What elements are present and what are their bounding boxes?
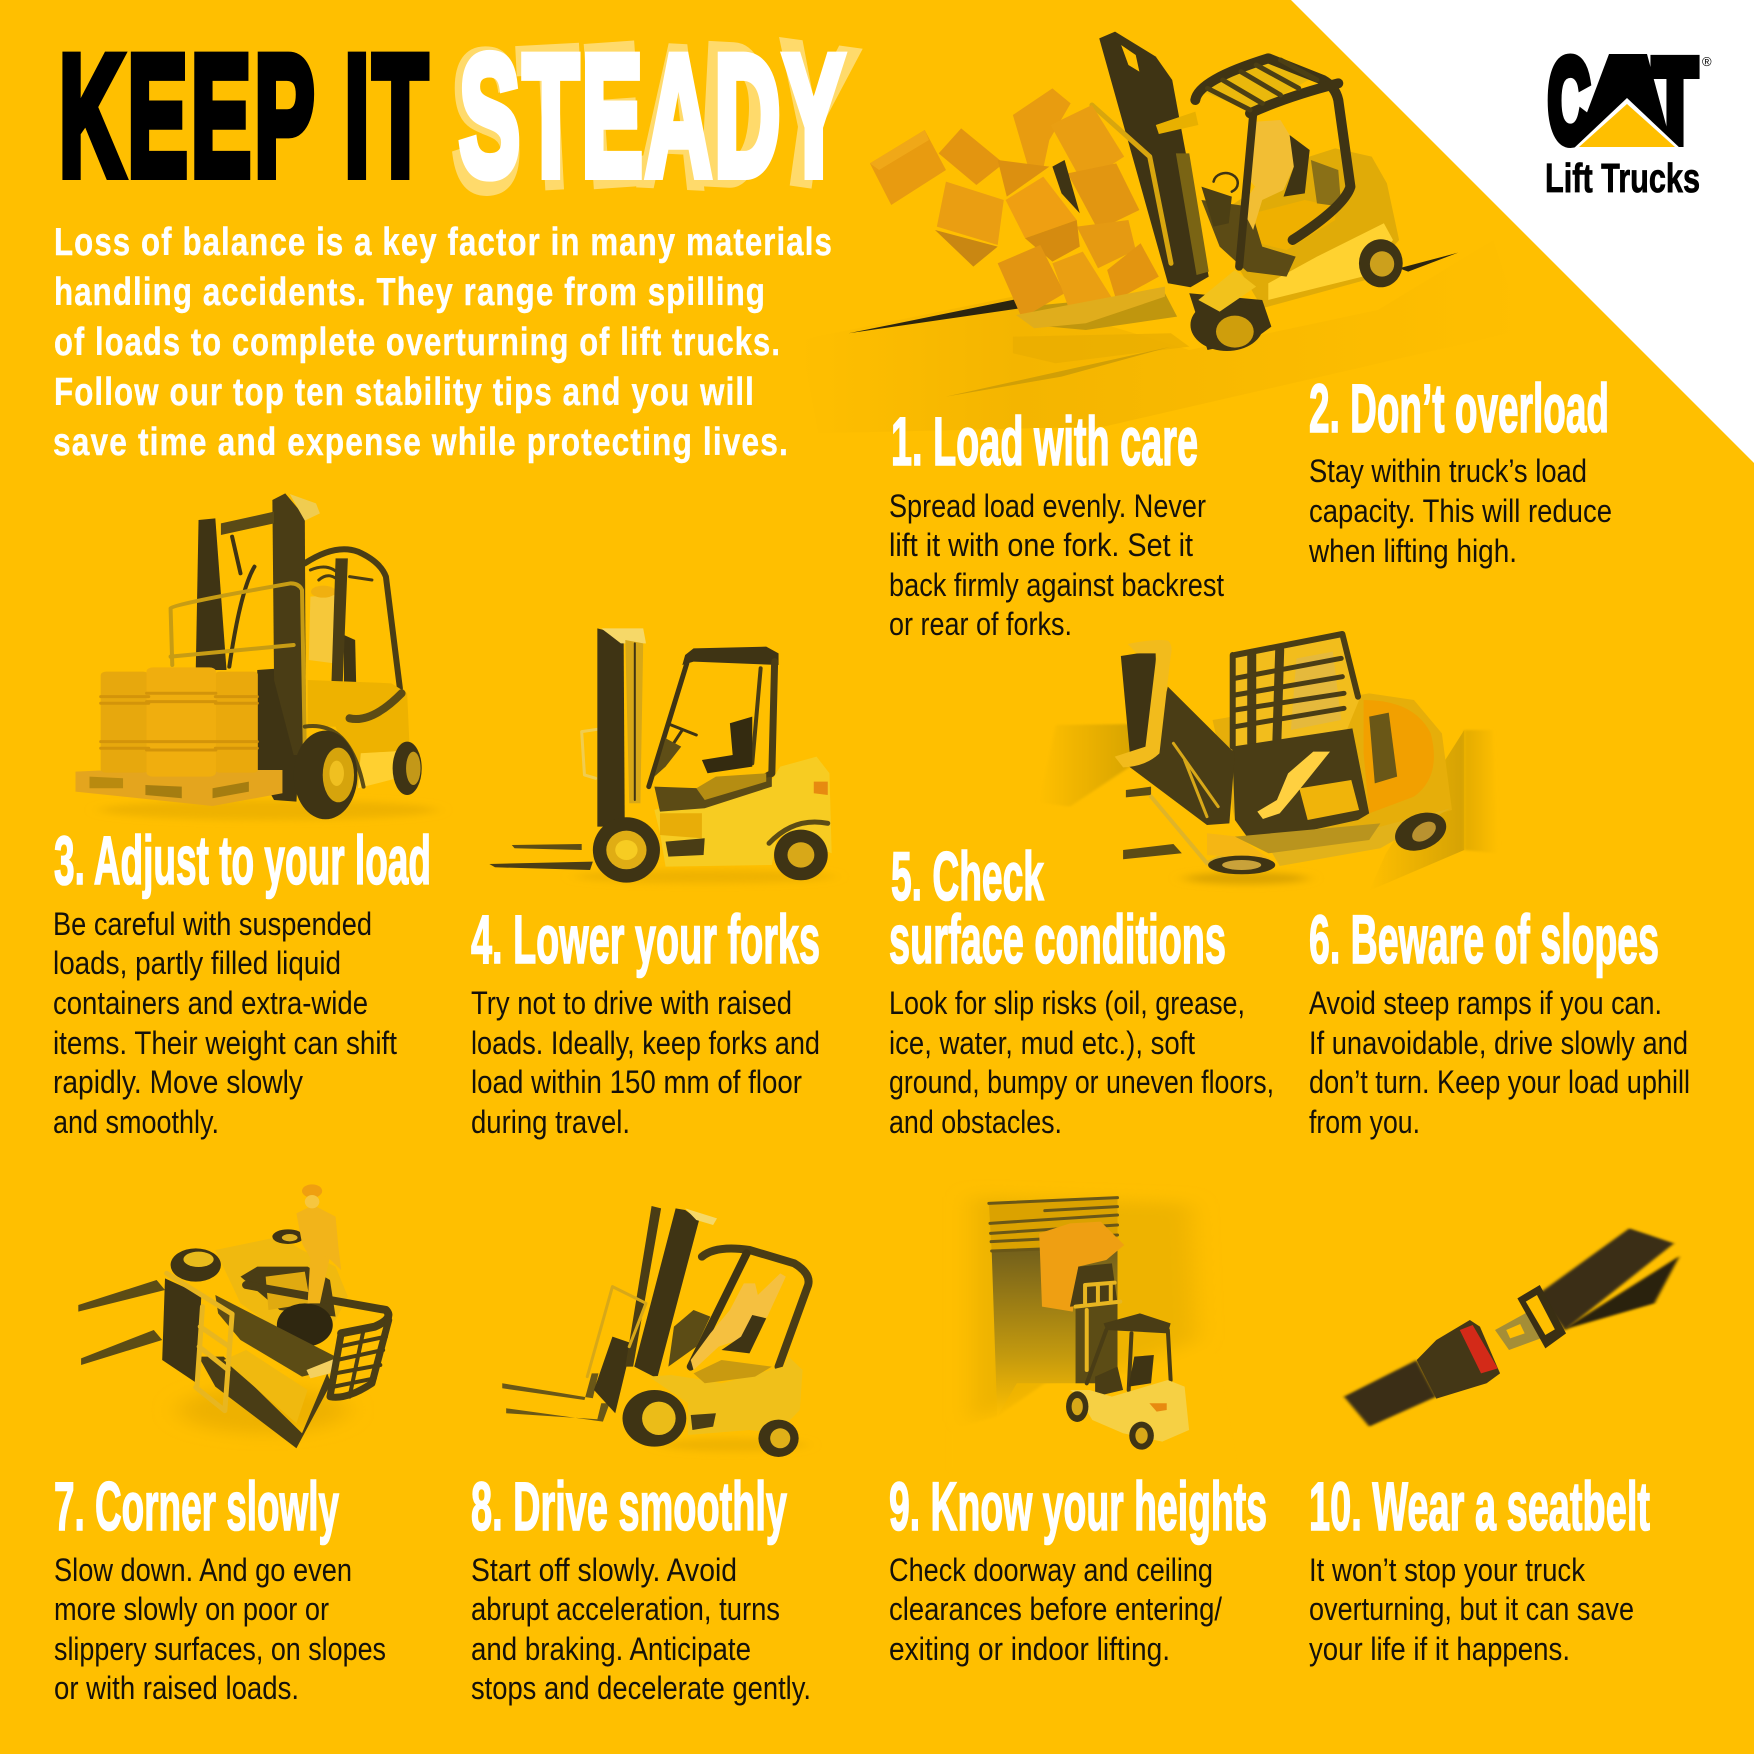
body text	[889, 488, 1224, 642]
body text	[1308, 453, 1612, 569]
title: Y	[756, 0, 866, 231]
logo: CAT Lift Trucks: C	[1548, 36, 1590, 168]
panel: tip 10 wear a seatbelt	[1309, 1228, 1680, 1667]
forks	[512, 844, 582, 850]
panel: tip 8 drive smoothly	[471, 1206, 811, 1706]
boxes	[1039, 1222, 1124, 1312]
body text	[889, 1552, 1222, 1667]
title: S	[449, 9, 523, 234]
body text: lift it with one fork. Set it	[889, 527, 1193, 563]
body	[215, 1237, 348, 1343]
pallet	[76, 770, 282, 806]
mast	[215, 1295, 336, 1377]
white corner	[1291, 0, 1754, 463]
cab	[305, 549, 400, 688]
intro text: of loads to complete overturning of lift trucks.	[54, 321, 781, 364]
person	[296, 1205, 341, 1303]
body text: Spread load evenly. Never	[889, 488, 1206, 524]
body text	[1309, 1552, 1634, 1667]
body text: when lifting high.	[1308, 533, 1517, 569]
forks	[502, 1373, 598, 1400]
body	[649, 1357, 803, 1435]
body text: Slow down. And go even	[54, 1552, 352, 1588]
body	[654, 757, 832, 867]
intro text	[53, 221, 833, 464]
body text: capacity. This will reduce	[1309, 493, 1612, 529]
title: A	[634, 4, 714, 230]
mast	[257, 667, 305, 802]
body text	[1309, 985, 1690, 1140]
body text: don’t turn. Keep your load uphill	[1309, 1064, 1690, 1100]
cab	[1104, 1313, 1171, 1333]
logo: CAT Lift Trucks: T	[1653, 36, 1697, 168]
driver	[691, 1273, 786, 1370]
body text: from you.	[1309, 1104, 1420, 1140]
body text: and smoothly.	[53, 1104, 219, 1140]
panel: tip 5 check surface conditions	[889, 633, 1498, 1140]
wheels and base	[1207, 833, 1271, 860]
body text: ground, bumpy or uneven floors,	[889, 1064, 1274, 1100]
body text: Look for slip risks (oil, grease,	[889, 985, 1245, 1021]
wheels	[593, 817, 660, 883]
illustration: overturned forklift seen from above	[1039, 633, 1498, 891]
panel: tip 2 don't overload	[1308, 370, 1612, 569]
body text: your life if it happens.	[1309, 1631, 1570, 1667]
wheels	[623, 1390, 686, 1447]
heading: 9. Know your heights	[889, 1468, 1267, 1545]
panel: tip 1 load with care	[800, 32, 1524, 642]
heading: surface conditions	[889, 901, 1226, 978]
body text	[471, 1552, 811, 1706]
body text: load within 150 mm of floor	[471, 1064, 802, 1100]
boxes	[870, 130, 946, 205]
carriage	[162, 1278, 201, 1383]
intro text: Loss of balance is a key factor in many materials	[54, 221, 833, 264]
body text: stops and decelerate gently.	[471, 1670, 811, 1706]
body text: loads. Ideally, keep forks and	[471, 1025, 820, 1061]
illustration: forklift on its side with driver sitting on top	[78, 1184, 389, 1448]
drums	[101, 672, 149, 773]
logo: CAT Lift Trucks: Lift Trucks	[1545, 155, 1700, 201]
forks	[1123, 844, 1182, 859]
wheels	[294, 731, 357, 819]
body	[1213, 693, 1452, 840]
body text: Be careful with suspended	[53, 906, 372, 942]
body text: clearances before entering/	[889, 1591, 1222, 1627]
title: E	[577, 2, 650, 228]
body text: Avoid steep ramps if you can.	[1309, 985, 1662, 1021]
body text: Check doorway and ceiling	[889, 1552, 1213, 1588]
body text: during travel.	[471, 1104, 630, 1140]
heading: 4. Lower your forks	[471, 901, 820, 978]
heading: 3. Adjust to your load	[54, 822, 431, 899]
driver	[309, 595, 336, 663]
body text	[54, 1552, 386, 1706]
body text: Try not to drive with raised	[471, 985, 792, 1021]
illustration: forklift with drums on pallet	[76, 493, 436, 820]
body text: or rear of forks.	[889, 606, 1072, 642]
body text: or with raised loads.	[54, 1670, 299, 1706]
logo: CAT Lift Trucks	[1545, 36, 1712, 201]
illustration: forklift tipping with boxes	[800, 32, 1524, 433]
body text	[471, 985, 820, 1140]
body text: more slowly on poor or	[54, 1591, 329, 1627]
body text: It won’t stop your truck	[1309, 1552, 1586, 1588]
body text: and braking. Anticipate	[471, 1631, 751, 1667]
body text: ice, water, mud etc.), soft	[889, 1025, 1195, 1061]
illustration: forklift rearing up	[502, 1206, 809, 1457]
cage	[246, 1285, 388, 1333]
wheels	[1066, 1391, 1088, 1422]
panel: tip 6 beware of slopes	[1309, 901, 1690, 1140]
panel: tip 9 know your heights	[889, 1197, 1267, 1667]
body text	[53, 906, 397, 1140]
body text: and obstacles.	[889, 1104, 1062, 1140]
illustration: forklift at low doorway	[950, 1197, 1235, 1470]
heading: 8. Drive smoothly	[471, 1468, 787, 1545]
cab	[1232, 633, 1359, 747]
mast	[1070, 1263, 1117, 1307]
intro text: handling accidents. They range from spilling	[54, 271, 766, 314]
title: KEEP IT	[59, 20, 431, 212]
panel: tip 4 lower your forks	[471, 628, 833, 1140]
heading: 1. Load with care	[891, 403, 1198, 480]
body text	[889, 985, 1274, 1140]
body text: abrupt acceleration, turns	[471, 1591, 780, 1627]
mast	[1099, 32, 1209, 287]
body text: back firmly against backrest	[889, 567, 1224, 603]
logo: CAT Lift Trucks: A	[1584, 36, 1670, 168]
wheels	[1189, 293, 1271, 350]
illustration: forklift with lowered forks	[489, 628, 833, 883]
cab	[682, 647, 779, 665]
panel: tip 3 adjust to your load	[53, 493, 436, 1140]
illustration: seatbelt and buckle	[1344, 1228, 1680, 1427]
body	[1220, 148, 1399, 308]
body	[308, 680, 409, 788]
intro text: Follow our top ten stability tips and you will	[54, 371, 755, 414]
heading: 7. Corner slowly	[54, 1468, 339, 1545]
intro text: save time and expense while protecting lives.	[53, 421, 789, 464]
title: STEADY	[459, 20, 847, 212]
driver	[1241, 120, 1294, 230]
body text: items. Their weight can shift	[53, 1025, 397, 1061]
cab	[1198, 58, 1317, 112]
forks	[78, 1280, 165, 1312]
body text: containers and extra-wide	[53, 985, 368, 1021]
body text: Start off slowly. Avoid	[471, 1552, 737, 1588]
body	[1070, 1380, 1189, 1442]
body text: Stay within truck’s load	[1309, 453, 1587, 489]
cab	[702, 1248, 809, 1367]
logo: CAT Lift Trucks: ®	[1702, 54, 1712, 69]
mast	[1120, 687, 1235, 825]
title: T	[514, 4, 588, 230]
body text: loads, partly filled liquid	[53, 945, 341, 981]
title: D	[694, 2, 774, 229]
body text: If unavoidable, drive slowly and	[1309, 1025, 1688, 1061]
panel: tip 7 corner slowly	[54, 1184, 389, 1706]
body text: rapidly. Move slowly	[53, 1064, 303, 1100]
heading	[889, 838, 1226, 978]
body text: overturning, but it can save	[1309, 1591, 1634, 1627]
body text: exiting or indoor lifting.	[889, 1631, 1170, 1667]
heading: 5. Check	[891, 838, 1044, 915]
mast	[594, 1337, 632, 1413]
body text: slippery surfaces, on slopes	[54, 1631, 386, 1667]
